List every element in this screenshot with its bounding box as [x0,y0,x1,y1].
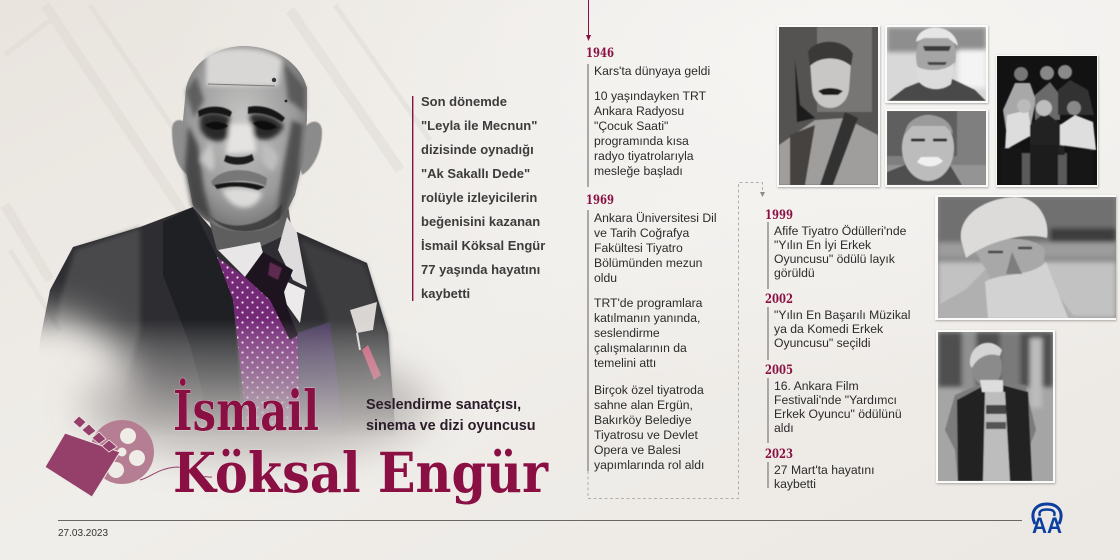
intro text block: kaybetti [421,286,470,301]
intro text block: "Leyla ile Mecnun" [421,118,537,133]
timeline column 2: "Yılın En Başarılı Müzikal [774,308,910,322]
timeline column 1: temelini attı [594,356,656,370]
intro text block: rolüyle izleyicilerin [421,190,537,205]
timeline column 2: 27 Mart'ta hayatını [774,463,875,477]
timeline column 1: 10 yaşındayken TRT [594,89,707,103]
timeline column 1: programında kısa [594,134,689,148]
year 2023: 2023 [765,447,793,462]
timeline column 1: oldu [594,271,617,285]
timeline column 1: çalışmalarının da [594,341,687,355]
photo 5: white bearded man in turban [935,195,1116,320]
timeline column 1: katılmanın yanında, [594,311,700,325]
shirt collar [218,242,263,277]
timeline column 2: Erkek Oyuncu" ödülünü [774,407,902,421]
jacket [33,207,396,440]
footer rule [58,520,1022,522]
pocket square [350,302,377,333]
timeline column 1: Bölümünden mezun [594,256,702,270]
timeline column 2: Afife Tiyatro Ödülleri'nde [774,224,907,238]
purple vest [217,257,302,440]
timeline column 2: görüldü [774,266,815,280]
title: Köksal Engür [173,440,549,505]
timeline column 1: seslendirme [594,326,660,340]
year 1946: 1946 [586,46,614,61]
timeline column 1: mesleğe başladı [594,164,683,178]
subtitle: sinema ve dizi oyuncusu [366,418,536,434]
portrait photo [33,46,396,440]
subtitle: Seslendirme sanatçısı, [366,397,521,413]
arrow: dashed connector [588,182,765,498]
timeline column 1: Birçok özel tiyatroda [594,383,704,397]
face detail [185,49,305,231]
head [183,46,307,232]
timeline column 1: Bakırköy Belediye [594,413,692,427]
photo 2: older man with beard [885,25,988,103]
icon: clapperboard and film reel [45,416,212,497]
timeline column 1: Ankara Üniversitesi Dil [594,211,717,225]
timeline column 1: ve Tarih Coğrafya [594,226,690,240]
timeline column 2 [765,208,910,491]
timeline column 1: Tiyatrosu ve Devlet [594,428,698,442]
photo 3: smiling man [885,109,988,187]
neck [210,208,291,250]
year 2002: 2002 [765,292,793,307]
intro text block: 77 yaşında hayatını [421,262,540,277]
timeline column 1: TRT'de programlara [594,296,703,310]
title [173,378,549,505]
intro text block: İsmail Köksal Engür [421,238,545,253]
timeline column 2: ya da Komedi Erkek [774,322,884,336]
timeline column 1: Opera ve Balesi [594,443,681,457]
timeline column 1: sahne alan Ergün, [594,398,693,412]
timeline column 1: Fakültesi Tiyatro [594,241,683,255]
timeline column 2: 16. Ankara Film [774,379,859,393]
timeline column 1: Ankara Radyosu [594,104,684,118]
intro text block: Son dönemde [421,94,507,109]
intro text block: beğenisini kazanan [421,214,540,229]
timeline column 1: Kars'ta dünyaya geldi [594,64,710,78]
tie [245,252,298,340]
fog behind portrait [80,350,430,460]
title: İsmail [173,378,319,443]
intro text block: dizisinde oynadığı [421,142,534,157]
timeline column 2: Oyuncusu" seçildi [774,336,870,350]
logo: AA: AA [1032,513,1062,538]
timeline column 2: "Yılın En İyi Erkek [774,238,872,252]
subtitle [366,397,536,434]
year 1999: 1999 [765,208,793,223]
year 2005: 2005 [765,363,793,378]
timeline column 2: aldı [774,421,794,435]
ears [172,120,194,175]
intro text block [412,94,545,301]
timeline column 2: Festivali'nde "Yardımcı [774,393,897,407]
timeline column 1 [586,46,717,472]
timeline column 2: Oyuncusu" ödülü layık [774,252,896,266]
timeline column 1: yapımlarında rol aldı [594,458,704,472]
photo 1: young actor with headband [777,25,880,187]
timeline column 1: "Çocuk Saati" [594,119,668,133]
photo 4: family group [996,55,1098,187]
year 1969: 1969 [586,193,614,208]
film strip background pattern [5,5,430,330]
timeline column 1: radyo tiyatrolarıyla [594,149,694,163]
intro text block: "Ak Sakallı Dede" [421,166,530,181]
date: 27.03.2023 [58,528,108,539]
timeline column 2: kaybetti [774,477,816,491]
arrow: timeline start [586,0,591,41]
photo 6: man with captain hat and vest [936,330,1055,483]
